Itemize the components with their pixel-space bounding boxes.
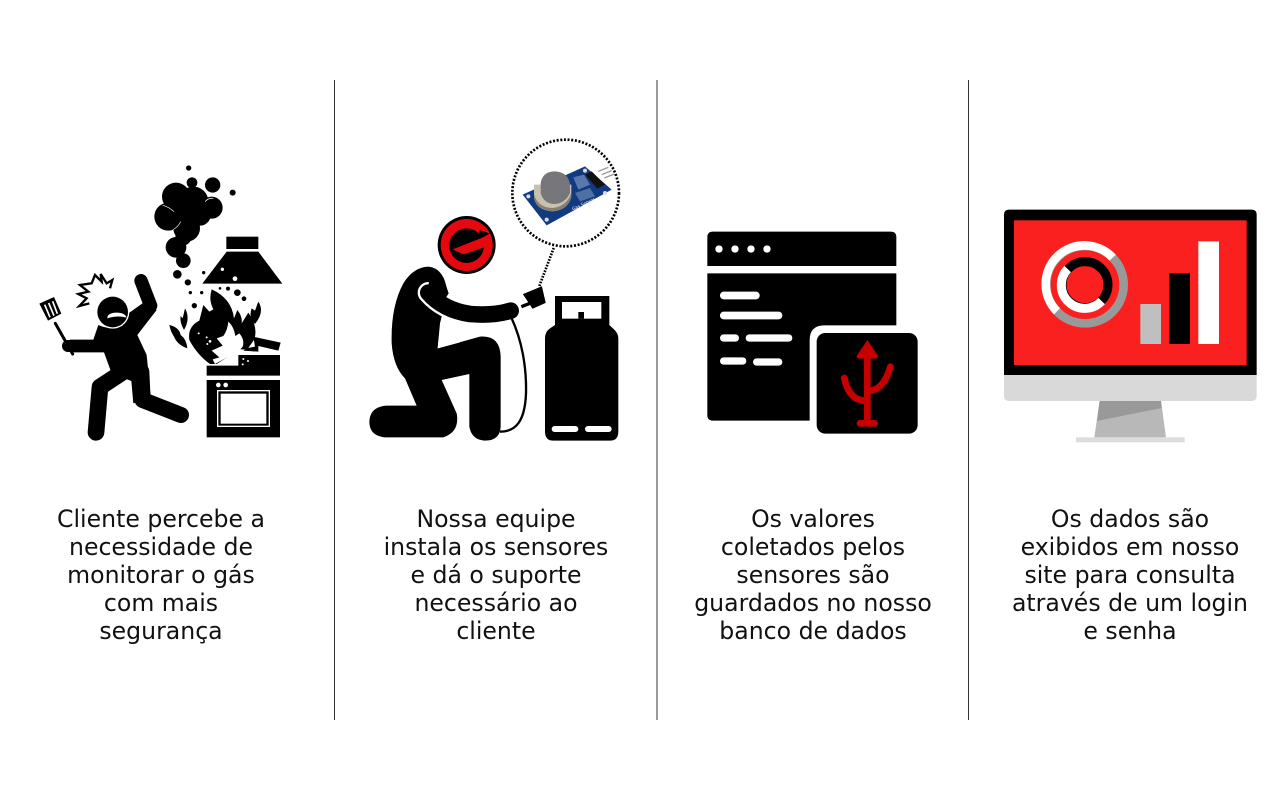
text block: step 4: Os dados são bbox=[1051, 505, 1209, 533]
browser window bbox=[707, 232, 896, 421]
monitor stand bbox=[1076, 401, 1185, 442]
text block: step 3 bbox=[694, 505, 932, 645]
text block: step 4 bbox=[1012, 505, 1248, 645]
text block: step 1: necessidade de bbox=[69, 533, 253, 561]
text block: step 2: instala os sensores bbox=[384, 533, 608, 561]
text block: step 2: necessário ao bbox=[414, 589, 578, 617]
text block: step 3: sensores são bbox=[736, 561, 890, 589]
sensor callout bbox=[512, 140, 619, 246]
text block: step 2 bbox=[384, 505, 608, 645]
flames bbox=[169, 279, 281, 364]
icon: person panicking at kitchen fire bbox=[39, 165, 282, 437]
text block: step 1: Cliente percebe a bbox=[57, 505, 265, 533]
technician bbox=[369, 267, 511, 441]
text block: step 3: Os valores bbox=[751, 505, 875, 533]
gas regulator and hose bbox=[500, 247, 554, 432]
text block: step 4: site para consulta bbox=[1024, 561, 1236, 589]
icon: monitor with dashboard bbox=[1004, 210, 1257, 442]
icon: browser window with database upload bbox=[707, 232, 918, 434]
text block: step 2: e dá o suporte bbox=[410, 561, 582, 589]
text block: step 1: segurança bbox=[99, 617, 223, 645]
monitor body bbox=[1004, 210, 1257, 401]
sensor callout: Gas Sensor bbox=[571, 196, 596, 212]
text block: step 1 bbox=[57, 505, 265, 645]
text block: step 1: monitorar o gás bbox=[67, 561, 255, 589]
text block: step 3: guardados no nosso bbox=[694, 589, 932, 617]
icon: technician installing gas sensor bbox=[369, 140, 619, 441]
person bbox=[39, 274, 181, 432]
text block: step 3: banco de dados bbox=[719, 617, 907, 645]
gas cylinder bbox=[545, 296, 618, 441]
smoke cloud bbox=[154, 165, 236, 285]
range hood bbox=[202, 237, 282, 284]
text block: step 4: exibidos em nosso bbox=[1021, 533, 1239, 561]
stove and oven bbox=[207, 355, 280, 437]
donut charts bbox=[1046, 245, 1124, 323]
text block: step 3: coletados pelos bbox=[721, 533, 905, 561]
logo badge bbox=[438, 216, 496, 274]
USB card bbox=[817, 333, 918, 434]
text block: step 2: Nossa equipe bbox=[416, 505, 576, 533]
text block: step 2: cliente bbox=[456, 617, 536, 645]
bar chart bbox=[1140, 241, 1219, 344]
text block: step 4: através de um login bbox=[1012, 589, 1248, 617]
text block: step 4: e senha bbox=[1083, 617, 1177, 645]
text block: step 1: com mais bbox=[104, 589, 218, 617]
